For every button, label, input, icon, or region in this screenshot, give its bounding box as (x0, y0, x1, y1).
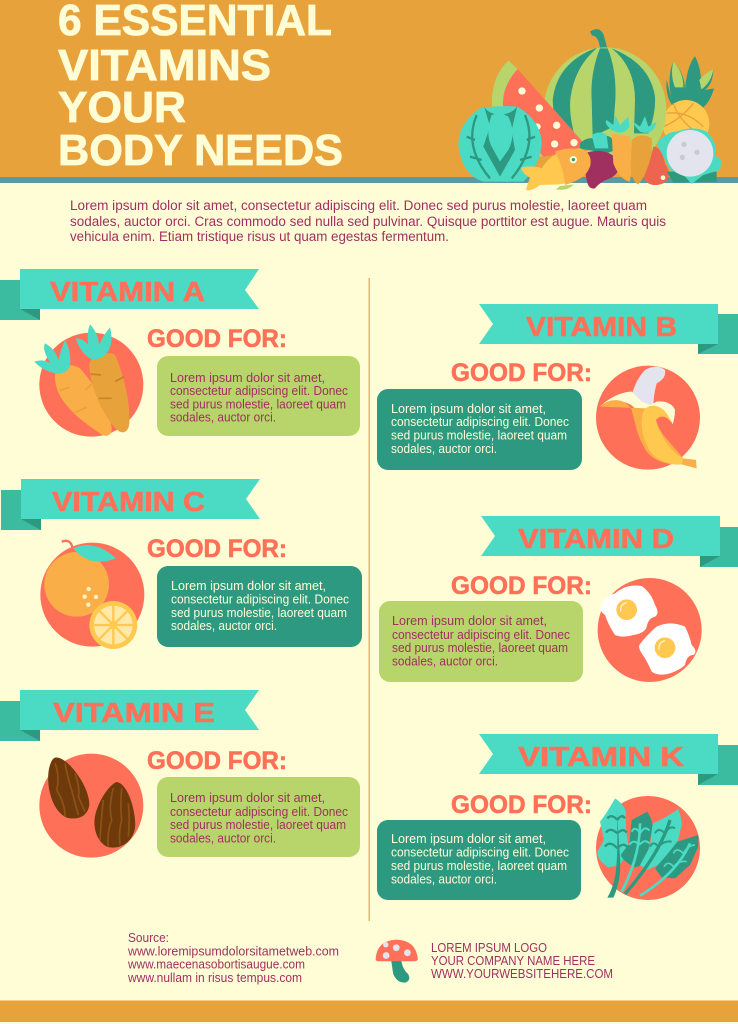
heading: good for: GOOD FOR: (147, 325, 287, 353)
text box: sodales, auctor orci. (170, 410, 276, 424)
text box (157, 777, 360, 857)
text box: Lorem ipsum dolor sit amet, (171, 579, 326, 593)
intro text: vehicula enim. Etiam tristique risus ut quam egestas fermentum. (70, 229, 449, 244)
ribbon: vitamin D: VITAMIN D (518, 523, 674, 554)
title: BODY NEEDS (58, 126, 343, 175)
panel: vitamin K (377, 734, 738, 900)
text box: sodales, auctor orci. (170, 832, 276, 846)
ribbon: vitamin C (1, 479, 260, 530)
text box: Lorem ipsum dolor sit amet, (170, 371, 325, 385)
text box: sed purus molestie, laoreet quam (171, 606, 347, 620)
intro text (70, 198, 666, 244)
text box (377, 389, 582, 470)
text box: sed purus molestie, laoreet quam (170, 818, 346, 832)
intro text: Lorem ipsum dolor sit amet, consectetur adipiscing elit. Donec sed purus molestie, laoreet quam (70, 198, 647, 213)
icon: almonds (39, 754, 143, 858)
panel: vitamin C (1, 479, 362, 649)
text box: consectetur adipiscing elit. Donec (171, 592, 349, 606)
source list: www.maecenasobortisaugue.com (127, 958, 305, 972)
text box: consectetur adipiscing elit. Donec (391, 415, 569, 429)
heading: good for: GOOD FOR: (147, 535, 287, 563)
ribbon: vitamin C: VITAMIN C (52, 486, 205, 517)
panel: vitamin D (379, 516, 738, 682)
company text: LOREM IPSUM LOGO (431, 941, 547, 955)
company text (431, 941, 613, 981)
ribbon: vitamin E: VITAMIN E (53, 697, 215, 728)
ribbon: vitamin E (0, 690, 259, 741)
text box: sodales, auctor orci. (391, 442, 497, 456)
text box: sed purus molestie, laoreet quam (391, 428, 567, 442)
title (58, 0, 343, 175)
text box (379, 601, 583, 682)
company text: YOUR COMPANY NAME HERE (431, 954, 595, 968)
icon: fried eggs (598, 578, 702, 682)
ribbon: vitamin D (481, 516, 738, 567)
text box (157, 566, 362, 647)
ribbon: vitamin A: VITAMIN A (50, 276, 205, 307)
icon: mushroom logo (376, 940, 418, 983)
text box: sed purus molestie, laoreet quam (392, 641, 568, 655)
header band (0, 0, 738, 183)
company text: WWW.YOURWEBSITEHERE.COM (431, 967, 613, 981)
text box: Lorem ipsum dolor sit amet, (170, 791, 325, 805)
text box: consectetur adipiscing elit. Donec (170, 384, 348, 398)
source list: Source: (128, 931, 169, 945)
text box: sed purus molestie, laoreet quam (170, 398, 346, 412)
source list: www.loremipsumdolorsitametweb.com (127, 944, 339, 958)
heading: good for: GOOD FOR: (147, 747, 287, 775)
source list (127, 931, 339, 985)
icon: orange and lemon (40, 541, 144, 649)
icon: spinach leaves (596, 796, 700, 900)
heading: good for: GOOD FOR: (451, 572, 592, 600)
text box: Lorem ipsum dolor sit amet, (391, 402, 546, 416)
text box: consectetur adipiscing elit. Donec (392, 628, 570, 642)
source list: www.nullam in risus tempus.com (127, 971, 302, 985)
text box: Lorem ipsum dolor sit amet, (392, 614, 547, 628)
center divider (368, 278, 370, 921)
panel: vitamin E (0, 690, 360, 858)
text box: sodales, auctor orci. (391, 872, 497, 886)
illustration: fruit and vegetables (458, 29, 721, 190)
heading: good for: GOOD FOR: (451, 791, 592, 819)
heading: good for: GOOD FOR: (451, 359, 592, 387)
text box (157, 356, 360, 436)
text box: sed purus molestie, laoreet quam (391, 859, 567, 873)
icon: banana (596, 366, 700, 470)
text box (377, 820, 581, 900)
text box: Lorem ipsum dolor sit amet, (391, 832, 546, 846)
panel: vitamin A (0, 269, 360, 437)
ribbon: vitamin B (479, 304, 738, 354)
title: VITAMINS (58, 41, 271, 90)
title: YOUR (58, 83, 186, 132)
panel: vitamin B (377, 304, 738, 470)
ribbon: vitamin K (479, 734, 738, 785)
text box: consectetur adipiscing elit. Donec (170, 805, 348, 819)
text box: sodales, auctor orci. (171, 619, 277, 633)
intro text: sodales, auctor orci. Cras commodo sed nulla sed pulvinar. Quisque porttitor est augue. Mauris quis (70, 214, 666, 229)
ribbon: vitamin B: VITAMIN B (526, 311, 677, 342)
ribbon: vitamin A (0, 269, 259, 320)
ribbon: vitamin K: VITAMIN K (518, 741, 684, 772)
icon: carrots (34, 324, 143, 437)
footer band (0, 1000, 738, 1022)
text box: sodales, auctor orci. (392, 654, 498, 668)
text box: consectetur adipiscing elit. Donec (391, 846, 569, 860)
